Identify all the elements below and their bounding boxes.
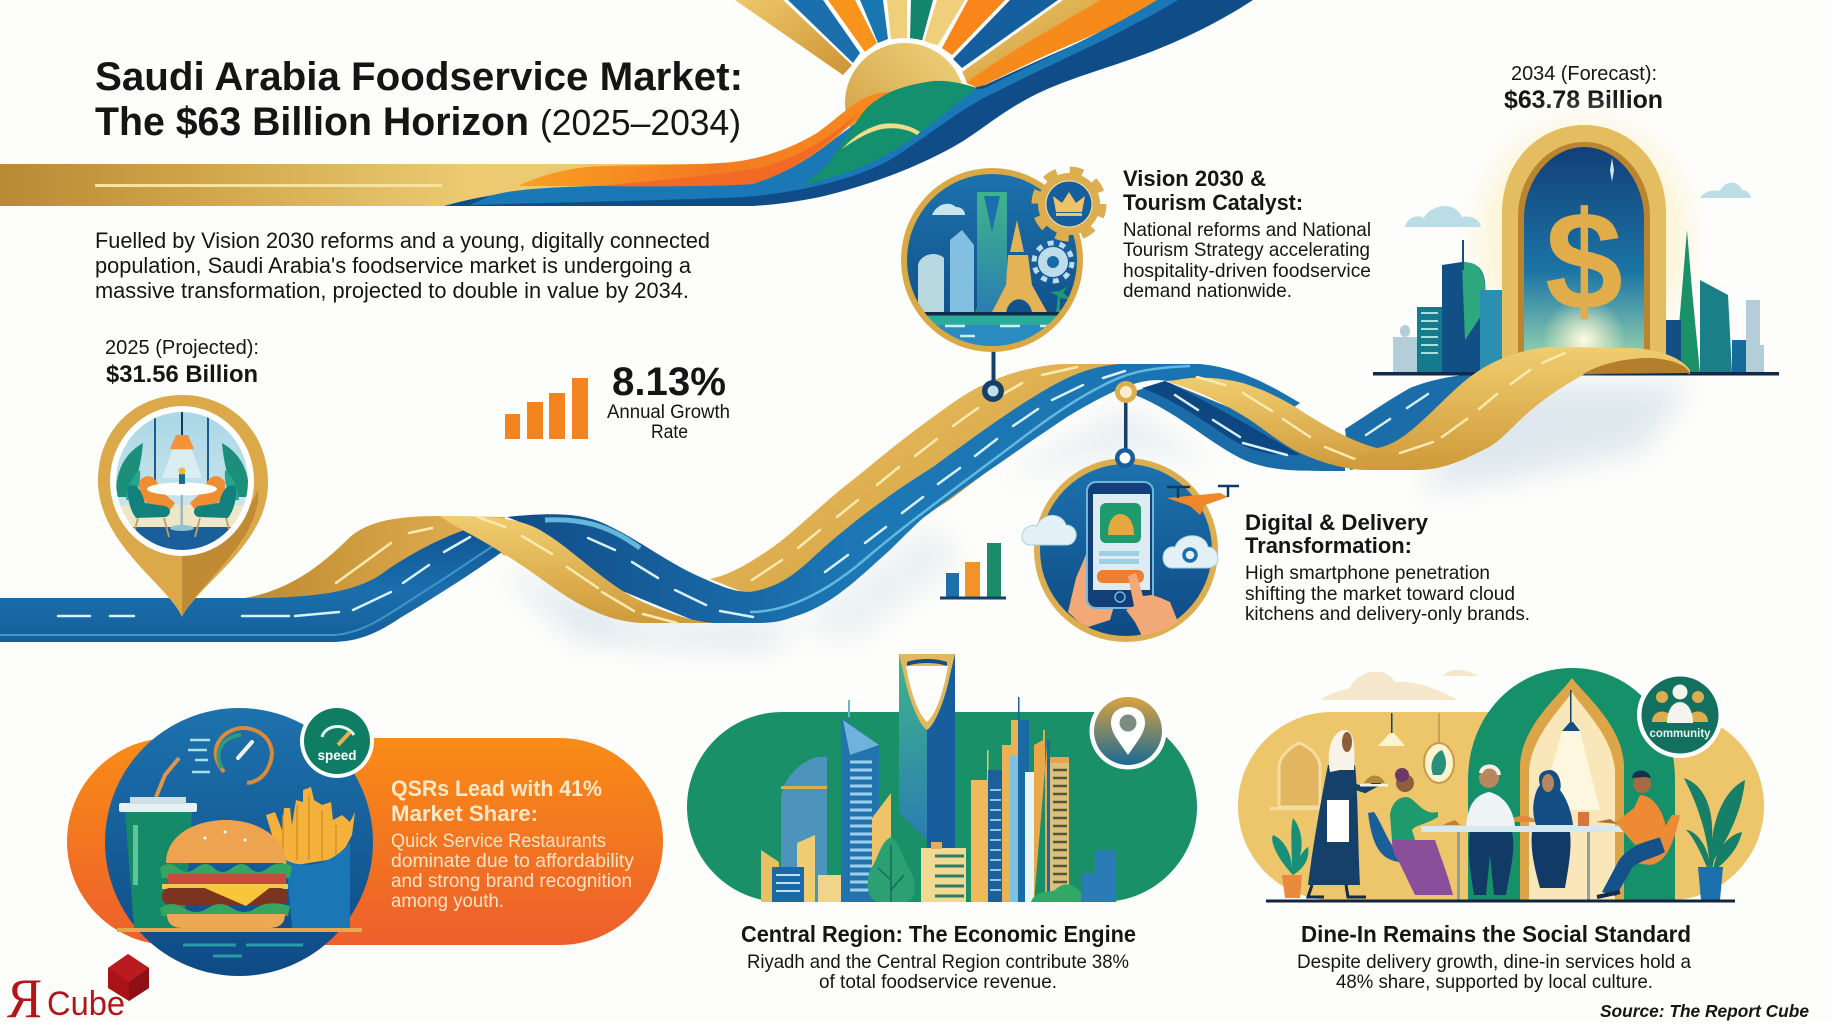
icon: fries [260,787,355,928]
table [147,482,217,496]
icon: holding hand [1068,554,1114,627]
2034 label [1504,63,1663,114]
intro paragraph: massive transformation, projected to double in value by 2034. [95,278,689,303]
vision 2030 medallion [900,168,1102,355]
winding road [0,364,1500,642]
QSR text: among youth. [391,890,504,912]
panel: dine-in [1238,668,1764,993]
dine-in body: 48% share, supported by local culture. [1336,971,1653,993]
green arch [1468,668,1675,900]
vision 2030 text: Vision 2030 & [1123,166,1266,191]
front chairs [128,485,170,518]
growth rate stat [505,360,730,443]
icon: dollar: $ [1545,182,1623,339]
hanging lamp [1378,713,1405,746]
icon: orange bars [505,378,588,439]
icon: speedometer [188,728,272,783]
title: (2025–2034) [540,102,741,143]
gold road right [1167,378,1417,470]
QSR text: and strong brand recognition [391,870,632,892]
dark blue ribbon [444,0,1253,206]
woman in hijab [1532,770,1573,888]
icon: crown gear [1036,171,1102,237]
cloud [1700,183,1751,198]
Kingdom tower [899,654,927,840]
orange ribbon [520,92,905,186]
small bar chart [940,543,1006,600]
digital text: kitchens and delivery-only brands. [1245,603,1530,625]
arch lamp [1540,690,1600,810]
2025 label: $31.56 Billion [106,361,258,388]
icon: gear cloud [1163,536,1218,568]
2034 label: $63.78 Billion [1504,86,1663,114]
icon: phone [1087,482,1153,608]
final gold ramp [1350,347,1690,470]
QSR text: Market Share: [391,801,538,826]
vision 2030 text: Tourism Catalyst: [1123,190,1303,215]
central body: of total foodservice revenue. [819,971,1057,993]
vision 2030 text: Tourism Strategy accelerating [1123,239,1370,261]
title [95,55,743,144]
central body: Riyadh and the Central Region contribute 38% [747,951,1129,973]
icon: community badge [1637,672,1723,758]
icon: community badge: community [1650,726,1711,740]
icon: speed badge: speed [317,748,357,763]
road dashes [58,371,1428,617]
arch [1502,125,1666,372]
skyline [761,654,1116,902]
source note: Source: The Report Cube [1600,1001,1809,1021]
window [1279,743,1320,807]
QSR text: QSRs Lead with 41% [391,776,602,801]
clouds [1321,670,1478,700]
central heading: Central Region: The Economic Engine [741,921,1136,947]
map pin: restaurant table [98,395,268,617]
vision 2030 text: hospitality-driven foodservice [1123,260,1371,282]
intro paragraph [95,228,710,303]
digital delivery medallion [1022,448,1239,642]
right plant [1684,778,1745,900]
icon: drink cup [119,758,197,928]
title: The $63 Billion Horizon [95,100,529,144]
2034 label: 2034 (Forecast): [1511,63,1657,85]
dine-in body [1297,951,1691,993]
intro paragraph: population, Saudi Arabia's foodservice market is undergoing a [95,253,691,278]
icon: speed badge [300,704,374,778]
waitress [1308,730,1388,897]
growth rate stat: Rate [651,422,688,443]
sun [840,38,970,168]
header ribbon with sunrise [0,0,1253,206]
road highlight [750,366,1190,612]
tray lines [183,945,303,956]
road underside [1130,381,1345,471]
icon: pointing hand [1126,573,1178,636]
cloud [1405,206,1481,227]
table [1421,812,1634,900]
icon: red cube [108,954,149,1001]
panel: QSR [67,704,663,976]
vision 2030 connector [982,350,1004,402]
vision 2030 text: National reforms and National [1123,219,1371,241]
QSR text [391,776,634,912]
skyline [1373,230,1779,376]
panel: central region [687,654,1197,993]
growth rate stat: Annual Growth [607,402,730,423]
road shadows [500,385,1690,650]
back gold hump [245,516,505,598]
digital text: shifting the market toward cloud [1245,583,1515,605]
central body [747,951,1129,993]
vision 2030 text [1123,166,1371,302]
logo [7,954,149,1030]
guest in green [1390,768,1453,895]
dine-in heading: Dine-In Remains the Social Standard [1301,921,1691,947]
vision 2030 text: demand nationwide. [1123,280,1292,302]
blue chair [1368,812,1423,862]
digital text: High smartphone penetration [1245,562,1490,584]
digital text: Digital & Delivery [1245,510,1428,535]
green hill [803,81,977,185]
icon: burger [160,820,292,928]
QSR text: Quick Service Restaurants [391,830,606,852]
tray [117,928,362,932]
growth rate stat: 8.13% [612,360,726,404]
lamp [181,412,183,435]
QSR text: dominate due to affordability [391,850,634,872]
man in orange [1597,770,1667,897]
logo: Cube [47,985,125,1023]
2025 label: 2025 (Projected): [105,337,259,359]
intro paragraph: Fuelled by Vision 2030 reforms and a young, digitally connected [95,228,710,253]
logo: Я [7,968,42,1030]
floor line [1266,900,1735,902]
plants [116,443,143,497]
gold band [0,160,790,206]
digital text: Transformation: [1245,533,1412,558]
mid blue ribbon [470,0,1178,205]
icon: drone [1167,486,1239,515]
towers [918,254,944,312]
icon: left cloud [1022,515,1076,545]
sun rays [735,0,1157,88]
back chairs [139,476,175,510]
digital text [1245,510,1530,625]
forecast gate with dollar [1350,90,1779,470]
blue road left [0,528,502,642]
orange chair [1626,815,1680,865]
rear blue road [1345,372,1500,470]
left plant [1272,818,1308,898]
blue road centre [507,364,1300,623]
hill highlight [842,123,920,149]
title: Saudi Arabia Foodservice Market: [95,55,743,99]
digital connector [1115,381,1137,450]
icon: location badge [1090,692,1166,770]
elder man [1466,766,1515,895]
floor [133,527,231,550]
2025 label [105,337,259,388]
dine-in body: Despite delivery growth, dine-in services hold a [1297,951,1691,973]
gold road front [440,516,715,623]
rising gold road [710,364,1125,595]
wall frame [1424,713,1454,783]
